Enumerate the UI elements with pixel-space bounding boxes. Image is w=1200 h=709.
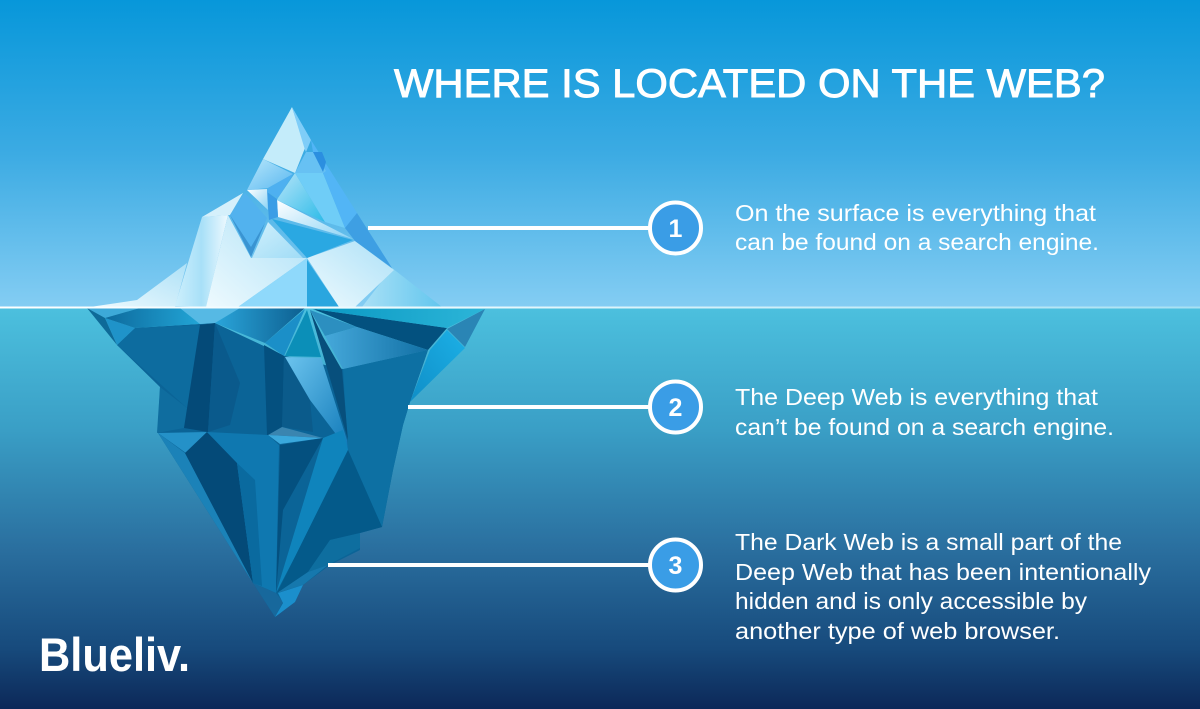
callout 2: can’t be found on a search engine. xyxy=(735,414,1114,440)
logo: Blueliv. xyxy=(39,628,190,681)
callout 3: The Dark Web is a small part of the xyxy=(735,529,1122,555)
callout 3 xyxy=(328,529,1151,644)
callout 2: The Deep Web is everything that xyxy=(735,384,1098,410)
sea background xyxy=(0,308,1200,709)
waterline xyxy=(0,306,1200,308)
callout 1: 1 xyxy=(669,215,683,243)
iceberg below water xyxy=(87,308,485,617)
callout 2 xyxy=(408,382,1114,440)
callout 1: can be found on a search engine. xyxy=(735,229,1099,255)
callout 1 xyxy=(368,200,1099,255)
callout 3: 3 xyxy=(669,552,682,580)
callout 2: 2 xyxy=(669,394,682,422)
iceberg above water xyxy=(90,107,442,307)
callout 3: Deep Web that has been intentionally xyxy=(735,559,1151,585)
callout 1: On the surface is everything that xyxy=(735,200,1096,226)
sky background xyxy=(0,0,1200,308)
callout 3: hidden and is only accessible by xyxy=(735,588,1087,614)
title: WHERE IS LOCATED ON THE WEB? xyxy=(394,62,1105,106)
callout 3: another type of web browser. xyxy=(735,618,1060,644)
